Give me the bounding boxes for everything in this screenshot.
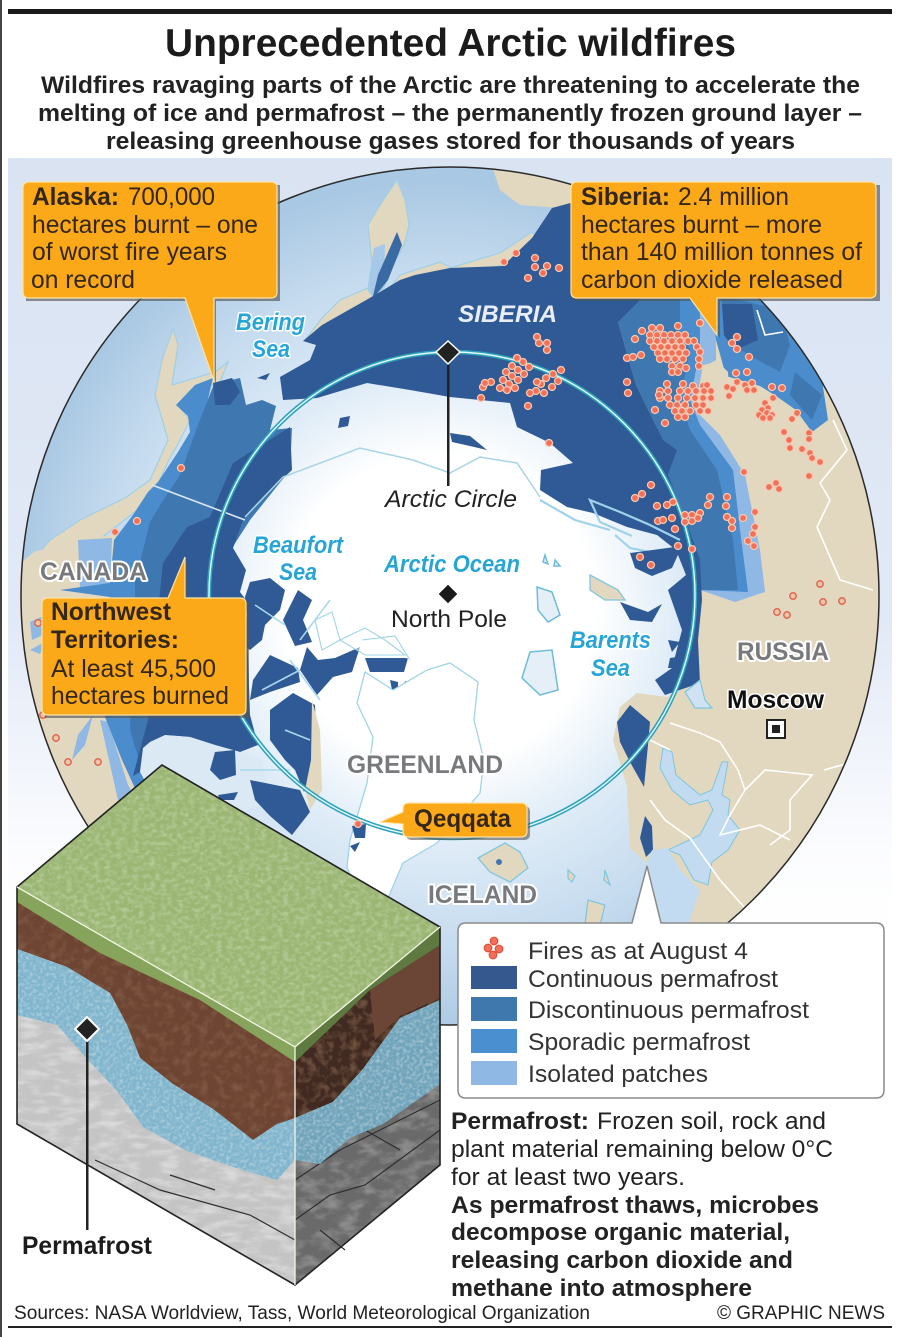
isolated patches: left bbox=[78, 538, 131, 800]
permafrost layer left bbox=[17, 949, 295, 1180]
label: Bering Sea bbox=[236, 309, 305, 363]
legend item: sporadic: Sporadic permafrost bbox=[528, 1029, 750, 1056]
Novaya Zemlya bbox=[590, 575, 625, 600]
callout: Siberia: than 140 million tonnes of bbox=[581, 238, 862, 266]
cube right grass strip bbox=[295, 927, 440, 1062]
Kamchatka patches bbox=[368, 244, 385, 302]
White Sea bbox=[685, 680, 712, 708]
North Pole marker and label bbox=[391, 584, 507, 633]
callout: Northwest Territories bbox=[42, 557, 249, 718]
callout: Siberia: hectares burnt – more bbox=[581, 211, 822, 239]
beige bay in isolated band bbox=[702, 360, 728, 377]
top rule bbox=[8, 9, 892, 14]
archipelago channels bbox=[240, 600, 330, 770]
discontinuous permafrost: left bbox=[130, 378, 292, 780]
label: Arctic Ocean: Arctic Ocean bbox=[383, 551, 520, 578]
land: Canada bbox=[22, 535, 134, 826]
text block: permafrost explanation bbox=[451, 1108, 833, 1302]
subtitle: releasing greenhouse gases stored for thousands of years bbox=[106, 128, 795, 155]
legend item: fires: Fires as at August 4 bbox=[528, 938, 748, 965]
land: Eurasia bbox=[490, 160, 900, 945]
credit: © GRAPHIC NEWS bbox=[717, 1303, 885, 1324]
legend item: continuous: Continuous permafrost bbox=[528, 966, 778, 993]
text block: permafrost explanation: for at least two years. bbox=[451, 1164, 685, 1191]
Alaska Canada border bbox=[152, 485, 245, 520]
cube front edges bbox=[17, 887, 440, 1285]
label: Iceland: ICELAND bbox=[428, 881, 537, 909]
discontinuous permafrost: right bbox=[618, 295, 822, 590]
callout: Northwest Territories: hectares burned bbox=[51, 682, 229, 710]
continuous permafrost: Alaska bump bbox=[213, 378, 240, 405]
cube left grass strip bbox=[17, 887, 295, 1062]
panel: permafrost cube bbox=[17, 765, 440, 1285]
label: Beaufort Sea bbox=[253, 532, 344, 586]
callout: Northwest Territories: Territories: bbox=[51, 626, 179, 654]
label: Bering Sea: Bering bbox=[236, 309, 305, 336]
callout: Siberia: Siberia: bbox=[581, 183, 670, 211]
cube left soil bbox=[17, 887, 295, 1140]
callout: Siberia: 2.4 million bbox=[678, 183, 789, 211]
Svalbard and Franz Josef bbox=[522, 555, 560, 695]
callout: Alaska bbox=[23, 182, 280, 384]
callout: Siberia: carbon dioxide released bbox=[581, 266, 843, 294]
callout: Qeqqata: Qeqqata bbox=[414, 805, 512, 833]
label: Barents Sea: Barents bbox=[570, 627, 651, 654]
small North Sea islands bbox=[568, 870, 610, 925]
bottom rule bbox=[8, 1326, 892, 1328]
Arctic archipelago bbox=[210, 578, 408, 835]
sources: Sources: NASA Worldview, Tass, World Meteorological Organization bbox=[14, 1303, 590, 1324]
text block: permafrost explanation: Permafrost: bbox=[451, 1108, 589, 1135]
label: Beaufort Sea: Beaufort bbox=[253, 532, 344, 559]
fires on land bbox=[35, 581, 845, 765]
callout: Alaska: Alaska: bbox=[32, 183, 119, 211]
text block: permafrost explanation: decompose organic material, bbox=[451, 1219, 790, 1246]
panel: polar map bbox=[0, 160, 900, 1025]
label: Barents Sea: Sea bbox=[591, 655, 630, 682]
permafrost layer right bbox=[295, 1000, 440, 1164]
label: Bering Sea: Sea bbox=[252, 336, 290, 363]
cube grass top bbox=[17, 765, 440, 1047]
North Pole marker and label: North Pole bbox=[391, 606, 507, 633]
Greenland ice sheet bbox=[347, 663, 484, 900]
land: Alaska peninsula bbox=[34, 329, 228, 568]
text block: permafrost explanation: releasing carbon dioxide and bbox=[451, 1247, 793, 1274]
left frame line bbox=[0, 0, 2, 1337]
continuous patch top right bbox=[722, 304, 758, 350]
cube left rock bbox=[17, 1000, 295, 1285]
Arctic Circle ring bbox=[209, 352, 695, 838]
map layers bbox=[0, 160, 900, 950]
callout: Alaska: on record bbox=[31, 266, 135, 294]
text block: permafrost explanation: plant material remaining below 0°C bbox=[451, 1136, 833, 1163]
Arctic Circle marker and label bbox=[383, 341, 517, 513]
label: Canada: CANADA bbox=[40, 558, 147, 586]
globe sea bbox=[21, 167, 879, 1025]
Arctic Circle marker and label: Arctic Circle bbox=[383, 486, 517, 513]
subtitle: Wildfires ravaging parts of the Arctic are threatening to accelerate the bbox=[41, 72, 860, 99]
label: Moscow: Moscow bbox=[727, 686, 825, 714]
callout: Siberia bbox=[571, 182, 880, 338]
North Sea bbox=[647, 848, 700, 922]
sporadic permafrost: left bbox=[60, 378, 213, 810]
archipelago island outlines bbox=[315, 612, 410, 660]
administrative borders bbox=[650, 310, 880, 925]
text block: permafrost explanation: As permafrost thaws, microbes bbox=[451, 1192, 819, 1219]
Qeqqata permafrost bbox=[350, 824, 366, 852]
legend item: isolated: Isolated patches bbox=[528, 1061, 708, 1088]
Scandinavia permafrost bbox=[617, 705, 653, 857]
text block: permafrost explanation: methane into atmosphere bbox=[451, 1275, 752, 1302]
Iceland permafrost patch bbox=[496, 859, 502, 865]
map background bbox=[8, 158, 892, 928]
permafrost pointer bbox=[75, 1017, 99, 1230]
text block: permafrost explanation: Frozen soil, rock and bbox=[597, 1108, 826, 1135]
Siberian inlets bbox=[540, 500, 680, 555]
callout: Northwest Territories: At least 45,500 bbox=[51, 655, 216, 683]
label: Greenland: GREENLAND bbox=[347, 751, 503, 779]
sea ice edge bbox=[245, 448, 540, 517]
icon: fire cluster bbox=[484, 937, 503, 959]
Iceland bbox=[478, 843, 528, 882]
legend item: discontinuous: Discontinuous permafrost bbox=[528, 997, 809, 1024]
islands: Siberian Arctic bbox=[257, 373, 690, 668]
callout: Alaska: hectares burnt – one bbox=[32, 211, 258, 239]
cube rock cracks bbox=[95, 1100, 440, 1250]
cube edges bbox=[17, 765, 440, 1285]
cube right rock bbox=[295, 1070, 440, 1285]
Kamchatka dark strip bbox=[372, 232, 402, 300]
fires on permafrost bbox=[112, 250, 824, 828]
icon: Moscow marker bbox=[767, 720, 785, 738]
label: Barents Sea bbox=[570, 627, 651, 682]
callout: Qeqqata bbox=[380, 803, 530, 840]
continuous permafrost: Siberia bbox=[280, 195, 702, 695]
Greenland west coast land bbox=[305, 700, 322, 810]
label: Permafrost: Permafrost bbox=[22, 1232, 153, 1260]
label: Russia: RUSSIA bbox=[737, 638, 829, 666]
Canada lakes and bay patches bbox=[30, 615, 93, 760]
title: Unprecedented Arctic wildfires bbox=[165, 22, 736, 65]
cube right soil lighter band bbox=[370, 945, 440, 1040]
label: Beaufort Sea: Sea bbox=[279, 559, 317, 586]
Baltic sea bbox=[660, 748, 740, 885]
isolated patches: right bbox=[690, 313, 765, 602]
subtitle bbox=[38, 72, 862, 155]
callout: Alaska: 700,000 bbox=[128, 183, 215, 211]
continuous permafrost: mainland Canada bbox=[133, 427, 292, 776]
cube right soil bbox=[295, 927, 440, 1118]
land: Kamchatka peninsula bbox=[305, 180, 540, 340]
callout: Alaska: of worst fire years bbox=[32, 238, 227, 266]
label: Siberia: SIBERIA bbox=[458, 301, 557, 328]
sporadic permafrost: right bbox=[657, 298, 828, 592]
callout: Northwest Territories: Northwest bbox=[51, 598, 172, 626]
panel: legend bbox=[458, 866, 884, 1098]
Hudson Bay bbox=[140, 735, 240, 806]
globe outline bbox=[21, 167, 879, 1025]
subtitle: melting of ice and permafrost – the permanently frozen ground layer – bbox=[38, 100, 862, 127]
